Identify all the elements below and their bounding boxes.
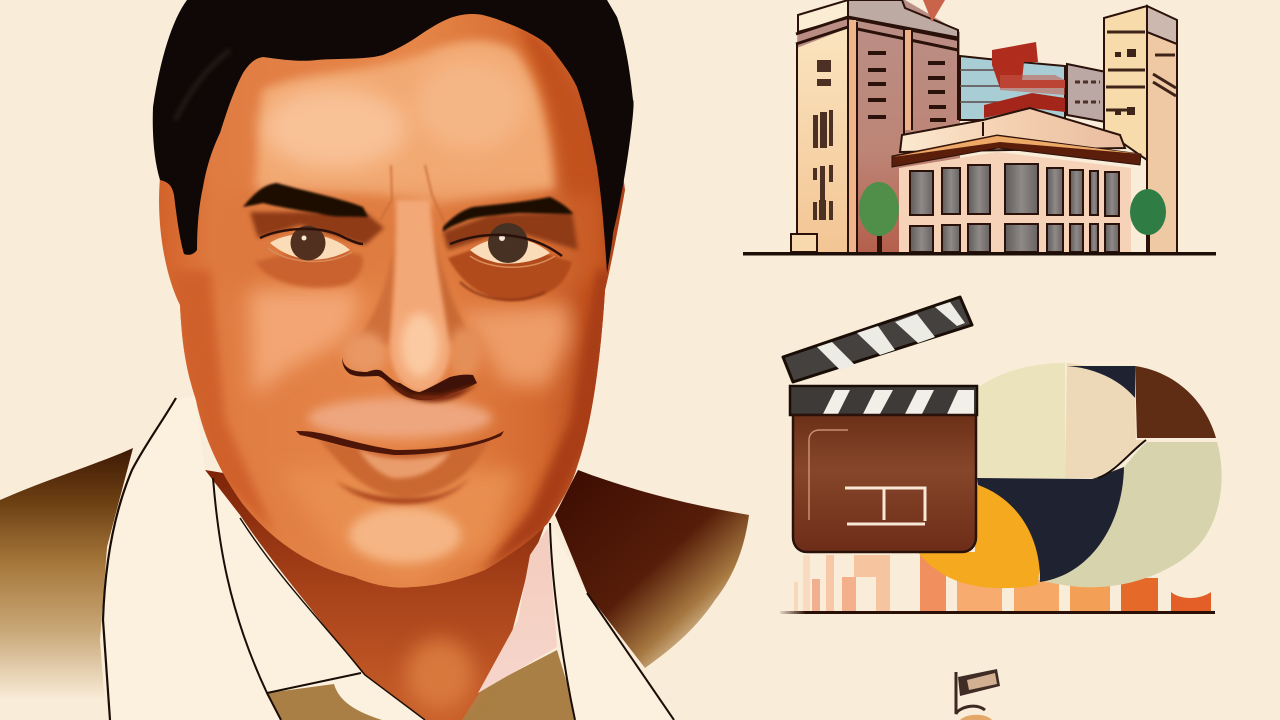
below brow tone bbox=[378, 192, 596, 280]
rooftop plume bbox=[923, 0, 945, 22]
left eyebrow bbox=[243, 183, 368, 217]
glass panels bbox=[910, 164, 1119, 252]
building illustration bbox=[743, 0, 1216, 256]
left cheek highlight bbox=[250, 290, 360, 397]
forehead highlight bbox=[255, 40, 555, 205]
hair bbox=[153, 0, 634, 273]
chart and clapperboard illustration bbox=[780, 297, 1222, 614]
pink shirt bbox=[478, 528, 557, 693]
face bbox=[159, 0, 625, 588]
slice navy low bbox=[977, 467, 1124, 582]
portrait of man bbox=[0, 0, 749, 720]
bridge highlight bbox=[390, 200, 450, 392]
pie chart bbox=[918, 363, 1222, 588]
eye bag left bbox=[255, 245, 363, 288]
alar right bbox=[448, 326, 482, 378]
center glass block bbox=[960, 42, 1106, 122]
slice cream bbox=[977, 363, 1065, 478]
windows: front bbox=[813, 60, 833, 220]
slice brown bbox=[1135, 366, 1216, 438]
left tower bbox=[791, 0, 960, 252]
tree right bbox=[1130, 189, 1166, 252]
jacket left bbox=[0, 448, 133, 720]
windows: side bbox=[868, 53, 946, 120]
clapper top stick bbox=[783, 297, 972, 382]
nostril soft shadow bbox=[385, 380, 478, 402]
tree left bbox=[859, 182, 899, 252]
low front building bbox=[892, 108, 1141, 252]
nose left plane bbox=[352, 225, 398, 345]
frown lines and bridge bbox=[380, 165, 446, 226]
eye bag right bbox=[448, 240, 572, 301]
brow shadow right bbox=[443, 212, 578, 250]
ground line bbox=[743, 252, 1216, 256]
neck lighter patch bbox=[406, 639, 474, 711]
lower cheek and chin tone bbox=[294, 465, 520, 567]
right eye bbox=[450, 223, 562, 267]
neck bbox=[205, 470, 545, 720]
slice navy top bbox=[1067, 366, 1135, 398]
slice sage bbox=[1032, 442, 1222, 587]
chin highlight bbox=[349, 507, 461, 563]
small flag icon bbox=[956, 669, 1000, 720]
shirt collar right bbox=[550, 523, 674, 720]
alar left bbox=[343, 332, 387, 374]
bar chart bbox=[794, 555, 1211, 612]
clapper lower stick bbox=[790, 386, 977, 415]
nose bbox=[342, 200, 482, 402]
upper lip highlight bbox=[308, 398, 492, 438]
undershirt right bbox=[450, 650, 578, 720]
slice tan bbox=[1065, 363, 1146, 478]
clapper body bbox=[793, 415, 976, 552]
undershirt left bbox=[267, 684, 382, 720]
nostril shadow bbox=[342, 357, 477, 400]
shirt collar left bbox=[103, 395, 425, 720]
jacket right bbox=[555, 470, 749, 668]
nose right plane bbox=[432, 225, 470, 345]
clapperboard bbox=[783, 297, 977, 552]
left eye bbox=[260, 226, 363, 262]
under eye lower edge bbox=[460, 282, 545, 300]
baseline bbox=[780, 611, 1215, 614]
slice orange bbox=[918, 485, 1040, 588]
mouth bbox=[296, 431, 504, 504]
clapper symbol bbox=[845, 488, 925, 524]
jaw shade right bbox=[480, 270, 612, 575]
brow shadow left bbox=[250, 212, 384, 245]
right eyebrow bbox=[443, 197, 573, 232]
right cheek highlight bbox=[457, 303, 570, 387]
right tower bbox=[1104, 6, 1177, 252]
temple shade right bbox=[515, 25, 610, 330]
